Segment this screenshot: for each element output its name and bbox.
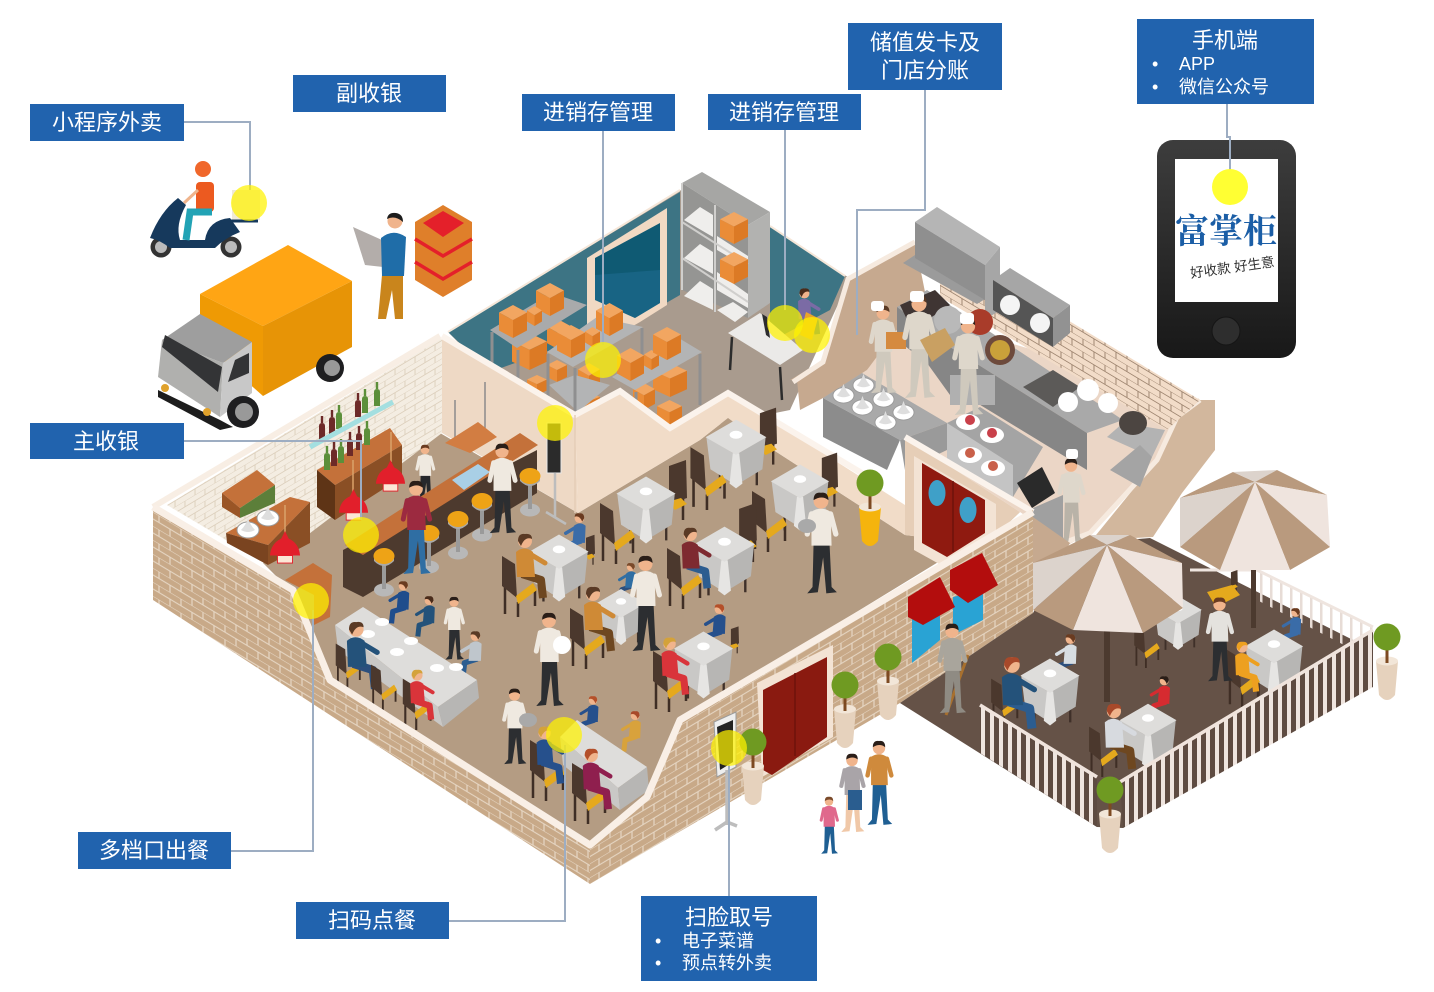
red crates <box>415 205 472 297</box>
customers family <box>821 741 892 854</box>
dome counter <box>823 373 947 470</box>
delivery scooter <box>150 161 260 258</box>
front railings <box>980 630 1373 828</box>
panel: back brick wall <box>153 336 442 565</box>
label: 小程序外卖: 小程序外卖 <box>52 110 162 135</box>
stove hood <box>903 207 1000 320</box>
panel: storage room <box>448 172 850 440</box>
label: 扫脸取号 <box>641 896 817 981</box>
icon: front door <box>757 645 833 777</box>
panel: outer walls <box>153 507 1070 884</box>
chefs <box>871 291 1084 542</box>
label: 副收银: 副收银 <box>336 81 402 106</box>
label: 手机端: • <box>1152 77 1158 97</box>
label: 进销存管理 left <box>522 94 675 131</box>
shelves: tall unit <box>682 172 770 322</box>
desk with staff <box>728 288 819 400</box>
label: 扫脸取号: • <box>655 931 661 951</box>
label: 储值发卡及门店分账: 门店分账 <box>881 58 969 83</box>
panel: dining tables and guests <box>335 408 838 824</box>
small side table <box>285 563 332 625</box>
label: 主收银 <box>30 423 184 459</box>
manager with clipboard and crates <box>353 205 472 319</box>
icon: red double door <box>914 456 996 570</box>
label: 主收银: 主收银 <box>73 429 139 454</box>
panel: dining floor <box>263 418 1020 845</box>
table with four guests <box>530 696 649 824</box>
shelves: metal racks with boxes <box>490 283 702 427</box>
icon: storage door <box>587 208 667 352</box>
phone <box>1157 140 1296 358</box>
icon: menu stand <box>546 423 566 524</box>
sweeper with broom <box>940 624 968 715</box>
panel: kitchen <box>790 207 1215 548</box>
staff behind bar <box>417 445 434 504</box>
label: 扫脸取号: 扫脸取号 <box>685 905 773 930</box>
wine cabinet <box>317 428 402 520</box>
pendant lamps <box>270 432 405 563</box>
label: 多档口出餐: 多档口出餐 <box>99 838 209 863</box>
label: 储值发卡及门店分账: 储值发卡及 <box>870 30 980 55</box>
icon: face scan kiosk <box>714 712 737 830</box>
main bar counter <box>343 433 538 597</box>
buffet <box>226 497 310 565</box>
label: 手机端: 手机端 <box>1192 28 1258 53</box>
label: 进销存管理 right <box>708 94 861 130</box>
long table <box>335 581 482 730</box>
label: 副收银 <box>293 75 446 112</box>
label: 多档口出餐 <box>78 832 231 869</box>
wall cabinet <box>993 268 1070 347</box>
panel: patio <box>900 470 1373 828</box>
label: 进销存管理 right: 进销存管理 <box>729 100 839 125</box>
label: 扫脸取号: • <box>655 953 661 973</box>
umbrella: back <box>1180 470 1330 628</box>
panel: partition walls <box>442 336 1033 570</box>
kitchen floor <box>823 290 1200 545</box>
stools <box>374 468 540 596</box>
label: 手机端: APP <box>1179 54 1215 74</box>
wine bottles and shelf <box>310 382 393 470</box>
display case <box>947 407 1063 540</box>
small hanging cabinet <box>222 470 275 518</box>
label: 小程序外卖 <box>30 104 184 141</box>
label: 扫码点餐: 扫码点餐 <box>328 908 416 933</box>
kitchen tan wall <box>790 242 925 410</box>
patio tables and guests <box>991 570 1303 777</box>
label: 扫码点餐 <box>296 902 449 939</box>
label: 手机端 <box>1137 19 1314 104</box>
waiters <box>504 493 837 764</box>
truck <box>158 245 352 430</box>
brick back wall <box>940 243 1200 430</box>
plants <box>740 470 1400 853</box>
label: 扫脸取号: 预点转外卖 <box>682 953 772 973</box>
label: 扫脸取号: 电子菜谱 <box>682 931 754 951</box>
label: 进销存管理 left: 进销存管理 <box>543 100 653 125</box>
label: 手机端: • <box>1152 54 1158 74</box>
umbrella: front <box>1033 535 1183 702</box>
awnings and windows <box>908 553 998 663</box>
label: 储值发卡及门店分账 <box>848 23 1002 90</box>
connector lines <box>184 90 1230 921</box>
yellow hotspots <box>231 169 1248 766</box>
panel: bar area <box>222 382 566 625</box>
bar staff <box>403 444 516 574</box>
slogan text: 好收款 好生意 <box>1189 253 1275 281</box>
back railing <box>1190 570 1373 660</box>
outer tan wall <box>1092 400 1215 540</box>
label: 手机端: 微信公众号 <box>1179 77 1269 97</box>
main counter <box>897 290 1165 487</box>
logo text: 富掌柜 <box>1175 213 1277 251</box>
rack above bar <box>445 382 497 453</box>
